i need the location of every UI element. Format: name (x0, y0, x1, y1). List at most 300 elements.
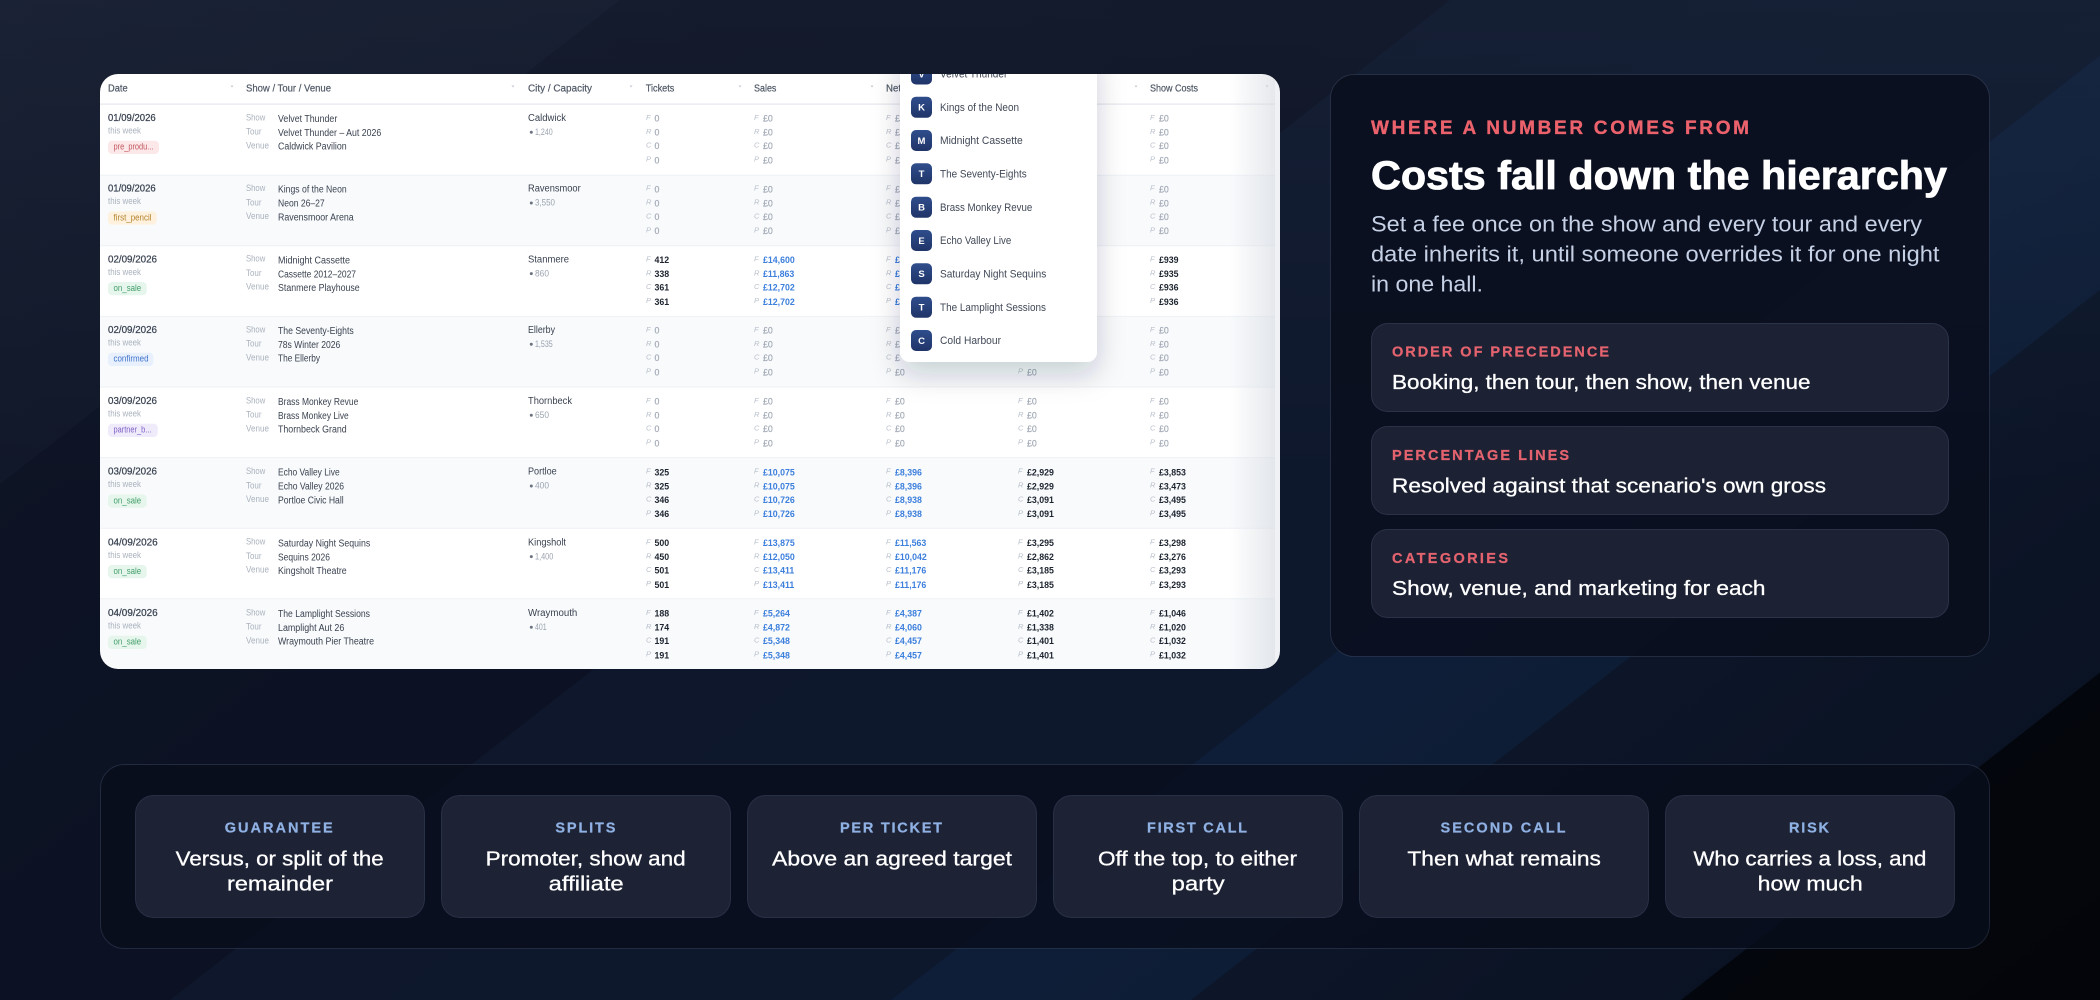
metrics: P (886, 650, 891, 659)
city cell (528, 256, 569, 276)
metrics (646, 467, 1186, 519)
table header: City / Capacity (528, 84, 592, 95)
metrics: £3,293 (1159, 580, 1186, 590)
metrics: F (754, 184, 759, 193)
city cell: Caldwick (528, 113, 567, 124)
item: Saturday Night Sequins: S (918, 269, 925, 280)
metrics: C (646, 282, 652, 291)
metrics: P (1150, 650, 1155, 659)
metrics: R (646, 268, 652, 277)
metrics: P (886, 296, 891, 305)
metrics: R (1150, 410, 1156, 419)
metrics: C (1018, 565, 1024, 574)
metrics: £11,176 (895, 580, 926, 590)
show tour venue cell (246, 607, 374, 648)
metrics: £0 (763, 424, 773, 434)
metrics: £11,563 (895, 538, 926, 548)
metrics (646, 254, 1179, 307)
metrics: C (754, 211, 760, 220)
row: Brass Monkey Revue (108, 395, 1169, 448)
card: risk: Who carries a loss, and (1693, 848, 1926, 871)
metrics: £4,387 (895, 609, 922, 619)
metrics: £0 (1027, 397, 1037, 407)
show tour venue cell: Show (246, 537, 266, 547)
card: per ticket (748, 796, 1036, 918)
show tour venue cell: 78s Winter 2026 (278, 340, 341, 351)
show tour venue cell: The Lamplight Sessions (278, 609, 370, 620)
metrics: £10,042 (895, 552, 927, 562)
date cell (108, 537, 158, 578)
metrics: £3,853 (1159, 467, 1186, 477)
show tour venue cell: Tour (246, 551, 262, 561)
date cell (108, 113, 159, 154)
metrics: R (754, 127, 760, 136)
date cell: 02/09/2026 (108, 254, 157, 265)
date cell: this week (108, 408, 141, 418)
metrics: £2,929 (1027, 481, 1054, 491)
metrics: £1,401 (1027, 650, 1054, 660)
metrics: P (754, 579, 759, 588)
metrics: £0 (763, 411, 773, 421)
show tour venue cell: Venue (246, 352, 269, 362)
date cell: this week (108, 196, 141, 206)
date cell: on_sale (114, 637, 141, 647)
city cell (528, 608, 577, 633)
item: Kings of the Neon: Kings of the Neon (940, 102, 1019, 114)
show tour venue cell: Tour (246, 127, 262, 137)
date cell: 02/09/2026 (108, 325, 157, 336)
show tour venue cell: Tour (246, 480, 262, 490)
city cell (528, 325, 555, 350)
show tour venue cell: Tour (246, 197, 262, 207)
item: Brass Monkey Revue: Brass Monkey Revue (940, 202, 1032, 214)
metrics: £0 (763, 184, 773, 194)
metrics: R (754, 410, 760, 419)
item: Cold Harbour: Cold Harbour (940, 335, 1001, 347)
metrics: £0 (1159, 397, 1169, 407)
metrics: P (886, 438, 891, 447)
show tour venue cell: Sequins 2026 (278, 552, 330, 563)
metrics: F (646, 254, 651, 263)
card: first call (1054, 796, 1342, 918)
metrics: C (1150, 353, 1156, 362)
metrics: P (754, 367, 759, 376)
metrics: F (1150, 113, 1155, 122)
item: The Seventy-Eights: T (919, 169, 925, 180)
metrics: F (1018, 537, 1023, 546)
show tour venue cell: The Seventy-Eights (278, 326, 354, 337)
metrics: 0 (654, 156, 660, 166)
metrics: F (754, 467, 759, 476)
metrics: R (1150, 198, 1156, 207)
metrics: P (1018, 508, 1023, 517)
metrics: C (646, 565, 652, 574)
metrics: 0 (654, 128, 660, 138)
city cell: 3,550 (535, 198, 555, 209)
metrics: £0 (895, 411, 905, 421)
metrics: P (646, 155, 651, 164)
city cell: Stanmere (528, 254, 569, 265)
show tour venue cell: Ravensmoor Arena (278, 212, 354, 223)
metrics: P (1150, 296, 1155, 305)
metrics: 0 (654, 424, 660, 434)
metrics: £1,046 (1159, 609, 1186, 619)
metrics: £4,457 (895, 650, 922, 660)
metrics: R (646, 622, 652, 631)
metrics: £ (895, 269, 900, 279)
metrics: £3,293 (1159, 565, 1186, 575)
card: first call: FIRST CALL (1147, 821, 1247, 837)
metrics: 0 (654, 353, 660, 363)
city cell (528, 396, 572, 418)
metrics: C (646, 353, 652, 362)
show tour venue cell: Show (246, 254, 266, 264)
show tour venue cell: Tour (246, 268, 262, 278)
metrics: P (1150, 367, 1155, 376)
metrics: 501 (654, 580, 669, 590)
metrics: R (886, 127, 892, 136)
metrics: £1,401 (1027, 636, 1054, 646)
metrics: £ (895, 283, 900, 293)
city cell: 1,240 (535, 127, 553, 138)
metrics: F (1150, 467, 1155, 476)
metrics: C (754, 141, 760, 150)
metrics: £0 (763, 141, 773, 151)
intro text: Set a fee once on the show and every tour and every (1371, 212, 1922, 237)
show tour venue cell (246, 397, 358, 432)
metrics: C (646, 636, 652, 645)
metrics: £11,176 (895, 565, 926, 575)
row: Midnight Cassette (108, 254, 1179, 307)
item: The Seventy-Eights: The Seventy-Eights (940, 168, 1027, 180)
metrics: £4,457 (895, 636, 922, 646)
show tour venue cell: Brass Monkey Revue (278, 397, 359, 408)
city cell: Kingsholt (528, 537, 566, 548)
show tour venue cell: Caldwick Pavilion (278, 142, 347, 153)
date cell: this week (108, 620, 141, 630)
metrics: F (754, 396, 759, 405)
metrics: £14,600 (763, 255, 795, 265)
metrics: R (646, 410, 652, 419)
metrics: £0 (1159, 212, 1169, 222)
metrics: £0 (1159, 353, 1169, 363)
panel: data table screenshot (100, 50, 1280, 669)
metrics: C (886, 211, 892, 220)
item: Kings of the Neon (911, 97, 1019, 118)
metrics: R (1018, 410, 1024, 419)
metrics: C (646, 494, 652, 503)
metrics: R (886, 410, 892, 419)
metrics: C (1018, 424, 1024, 433)
metrics: £0 (763, 114, 773, 124)
metrics: C (754, 424, 760, 433)
eyebrow: WHERE A NUMBER COMES FROM (1371, 118, 1749, 139)
metrics: P (754, 508, 759, 517)
metrics: 0 (654, 340, 660, 350)
metrics: F (646, 184, 651, 193)
metrics: £0 (1027, 424, 1037, 434)
card: risk: RISK (1789, 821, 1830, 837)
intro text: in one hall. (1371, 272, 1483, 297)
item: Saturday Night Sequins (911, 263, 1047, 284)
city cell (528, 467, 556, 488)
metrics: £935 (1159, 269, 1179, 279)
metrics: R (1150, 127, 1156, 136)
metrics: £0 (895, 438, 905, 448)
metrics: P (754, 155, 759, 164)
card: guarantee: remainder (227, 873, 333, 896)
metrics: £3,091 (1027, 509, 1054, 519)
metrics: P (646, 225, 651, 234)
card: categories: Show, venue, and marketing for each (1392, 577, 1766, 600)
metrics: £ (895, 340, 900, 350)
metrics: 325 (654, 467, 669, 477)
metrics: F (886, 254, 891, 263)
metrics: £0 (1159, 114, 1169, 124)
metrics: R (1018, 481, 1024, 490)
card: guarantee: GUARANTEE (225, 821, 333, 837)
card: splits: affiliate (549, 873, 624, 896)
metrics: 361 (654, 283, 669, 293)
metrics: 361 (654, 297, 669, 307)
metrics: F (646, 537, 651, 546)
metrics: C (754, 636, 760, 645)
metrics: 501 (654, 565, 669, 575)
metrics: R (646, 198, 652, 207)
metrics: F (1150, 608, 1155, 617)
date cell (108, 396, 158, 437)
metrics: £0 (895, 368, 905, 378)
metrics: R (1150, 622, 1156, 631)
show tour venue cell: Lamplight Aut 26 (278, 623, 345, 634)
date cell: this week (108, 550, 141, 560)
metrics: £1,402 (1027, 609, 1054, 619)
metrics: C (886, 565, 892, 574)
panel: deal terms strip (100, 764, 1990, 948)
metrics: R (1150, 339, 1156, 348)
date cell: partner_b... (114, 425, 152, 435)
card: order of precedence: ORDER OF PRECEDENCE (1392, 345, 1609, 361)
metrics: R (1018, 622, 1024, 631)
show tour venue cell: Velvet Thunder – Aut 2026 (278, 128, 382, 139)
show tour venue cell: Cassette 2012–2027 (278, 269, 356, 280)
item: Midnight Cassette (911, 130, 1023, 151)
metrics: £8,396 (895, 467, 922, 477)
card: risk: how much (1758, 873, 1863, 896)
metrics: P (886, 367, 891, 376)
metrics: £0 (1159, 156, 1169, 166)
date cell: pre_produ... (114, 142, 154, 152)
intro text (1371, 212, 1940, 297)
date cell: 04/09/2026 (108, 537, 158, 548)
metrics: R (886, 339, 892, 348)
metrics: £12,702 (763, 283, 795, 293)
card: order of precedence (1372, 324, 1948, 412)
metrics: R (646, 127, 652, 136)
date cell: on_sale (114, 566, 141, 576)
metrics: 346 (654, 495, 669, 505)
metrics: £12,702 (763, 297, 795, 307)
metrics: £936 (1159, 297, 1179, 307)
date cell (108, 325, 157, 366)
metrics: £0 (763, 156, 773, 166)
metrics: £5,348 (763, 650, 790, 660)
metrics: R (754, 339, 760, 348)
metrics: P (886, 155, 891, 164)
metrics: £0 (1159, 128, 1169, 138)
date cell: first_pencil (114, 212, 152, 222)
metrics: R (886, 268, 892, 277)
metrics: C (886, 424, 892, 433)
metrics: 174 (654, 623, 669, 633)
metrics: 191 (654, 650, 669, 660)
metrics: £ (895, 141, 900, 151)
metrics: F (754, 325, 759, 334)
item: The Lamplight Sessions: The Lamplight Sessions (940, 302, 1046, 314)
metrics: £10,075 (763, 467, 795, 477)
card: second call: SECOND CALL (1440, 821, 1566, 837)
metrics: £939 (1159, 255, 1179, 265)
intro text: date inherits it, until someone overrides it for one night (1371, 242, 1940, 267)
metrics: P (886, 579, 891, 588)
metrics: £0 (1159, 411, 1169, 421)
metrics: 0 (654, 184, 660, 194)
metrics: C (1018, 636, 1024, 645)
metrics: 0 (654, 226, 660, 236)
show tour venue cell (246, 324, 354, 365)
metrics: £3,495 (1159, 509, 1186, 519)
date cell: this week (108, 267, 141, 277)
metrics: £3,185 (1027, 580, 1054, 590)
metrics: £1,338 (1027, 623, 1054, 633)
metrics: F (886, 113, 891, 122)
metrics: 0 (654, 326, 660, 336)
metrics: C (886, 353, 892, 362)
metrics: £2,929 (1027, 467, 1054, 477)
item: The Lamplight Sessions: T (919, 302, 925, 314)
card: categories (1372, 530, 1948, 618)
metrics: £1,032 (1159, 636, 1186, 646)
metrics: C (1150, 141, 1156, 150)
item: The Lamplight Sessions (911, 297, 1046, 318)
metrics: £0 (763, 438, 773, 448)
metrics: 338 (654, 269, 669, 279)
metrics: R (754, 481, 760, 490)
metrics: P (1018, 438, 1023, 447)
date cell (108, 254, 157, 295)
card: first call: Off the top, to either (1098, 848, 1297, 871)
metrics: £ (895, 353, 900, 363)
metrics: £0 (763, 198, 773, 208)
table header: Sales (754, 84, 776, 95)
show tour venue cell: Stanmere Playhouse (278, 283, 360, 294)
metrics: C (1150, 494, 1156, 503)
item: Velvet Thunder: Velvet Thunder (940, 69, 1008, 81)
metrics: C (754, 353, 760, 362)
metrics: C (886, 141, 892, 150)
metrics: 412 (654, 255, 669, 265)
metrics: R (1018, 551, 1024, 560)
metrics: F (754, 537, 759, 546)
metrics: £13,411 (763, 580, 794, 590)
metrics: C (886, 494, 892, 503)
metrics: F (886, 184, 891, 193)
metrics: 0 (654, 212, 660, 222)
metrics: P (646, 579, 651, 588)
metrics: P (754, 225, 759, 234)
metrics: £1,032 (1159, 650, 1186, 660)
metrics: £0 (763, 212, 773, 222)
table header: Show Costs (1150, 84, 1198, 95)
show tour venue cell: Echo Valley Live (278, 468, 340, 479)
show tour venue cell: Echo Valley 2026 (278, 482, 344, 493)
date cell: 03/09/2026 (108, 467, 157, 478)
show tour venue cell: Venue (246, 211, 269, 221)
metrics: F (886, 537, 891, 546)
show tour venue cell (246, 468, 344, 504)
metrics: F (1018, 467, 1023, 476)
metrics: F (1150, 325, 1155, 334)
metrics: P (646, 438, 651, 447)
item: Cold Harbour: C (918, 336, 925, 347)
city cell: 400 (535, 481, 549, 492)
metrics: F (1018, 608, 1023, 617)
metrics: C (646, 424, 652, 433)
table header: Net (886, 84, 901, 95)
item: Brass Monkey Revue: B (918, 202, 925, 214)
table header: Tickets (646, 84, 674, 95)
metrics: £3,295 (1027, 538, 1054, 548)
card: order of precedence: Booking, then tour, then show, then venue (1392, 371, 1810, 394)
metrics (646, 113, 1169, 166)
metrics: £0 (895, 424, 905, 434)
metrics: 0 (654, 368, 660, 378)
metrics: 450 (654, 552, 669, 562)
date cell: on_sale (114, 495, 141, 505)
metrics: R (886, 198, 892, 207)
row: The Seventy-Eights (108, 324, 1169, 378)
date cell: 01/09/2026 (108, 113, 156, 124)
city cell: 650 (535, 410, 549, 421)
date cell: this week (108, 479, 141, 489)
metrics: P (646, 296, 651, 305)
show tour venue cell: Show (246, 607, 266, 617)
show tour venue cell: Venue (246, 635, 269, 645)
metrics (646, 608, 1186, 660)
metrics: F (646, 396, 651, 405)
metrics: P (1150, 438, 1155, 447)
row: Saturday Night Sequins (108, 537, 1186, 590)
metrics: F (646, 113, 651, 122)
card: splits: Promoter, show and (486, 848, 686, 871)
metrics: £ (895, 184, 900, 194)
metrics: C (1150, 211, 1156, 220)
metrics: £0 (763, 128, 773, 138)
metrics: P (886, 225, 891, 234)
metrics: C (886, 636, 892, 645)
metrics: £4,872 (763, 623, 790, 633)
metrics: £ (895, 255, 900, 265)
metrics: R (886, 622, 892, 631)
metrics: F (1150, 537, 1155, 546)
metrics: R (1150, 481, 1156, 490)
metrics: £5,348 (763, 636, 790, 646)
item: Velvet Thunder: V (918, 69, 925, 80)
metrics: P (886, 508, 891, 517)
heading: Costs fall down the hierarchy (1371, 154, 1948, 198)
dropdown menu (900, 50, 1097, 362)
card: guarantee: Versus, or split of the (176, 848, 384, 871)
